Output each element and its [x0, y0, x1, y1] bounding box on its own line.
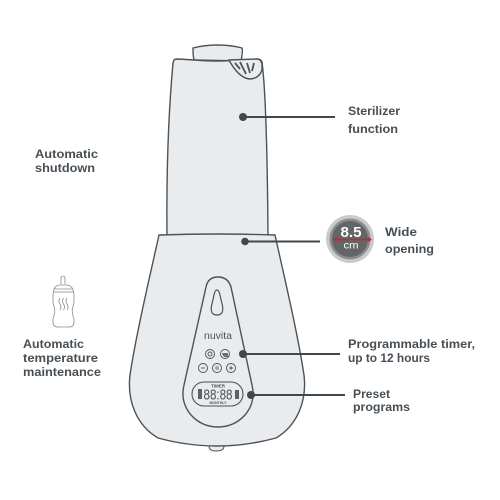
leader line: timer: [239, 350, 340, 358]
icon: 8.5 cm wide opening badge: [326, 215, 374, 263]
device: bottle warmer: [129, 45, 305, 451]
sterilizer upper body: [167, 59, 268, 236]
label: programmable timer: Programmable timer,: [348, 339, 475, 351]
label: automatic temperature maintenance: temperature: [23, 353, 98, 365]
leader line: sterilizer: [239, 113, 335, 121]
label: wide opening: [385, 227, 434, 256]
label: preset programs: Preset: [353, 389, 390, 401]
lid latch: [229, 59, 262, 79]
leader line: preset programs: [247, 391, 345, 399]
timer display: TIMER: [211, 384, 226, 388]
timer display: MONTHLY: [210, 401, 227, 405]
base body: [129, 234, 305, 446]
label: automatic shutdown: [35, 149, 99, 175]
drop indicator: [211, 290, 223, 315]
icon: 8.5 cm wide opening badge: 8.5: [340, 225, 362, 241]
label: programmable timer: up to 12 hours: [348, 353, 430, 365]
label: preset programs: [353, 389, 410, 414]
label: preset programs: programs: [353, 402, 410, 414]
base foot: [209, 446, 224, 451]
label: automatic shutdown: Automatic: [35, 149, 99, 161]
label: wide opening: Wide: [385, 227, 417, 239]
control buttons: [198, 350, 236, 372]
icon: baby bottle with heat waves: [53, 276, 74, 327]
label: automatic temperature maintenance: [23, 339, 101, 379]
leader line: wide opening: [241, 238, 320, 245]
label: sterilizer function: function: [348, 124, 398, 136]
brand logo: nuvita: [204, 330, 232, 342]
label: sterilizer function: [348, 106, 401, 136]
label: programmable timer: [348, 339, 475, 365]
label: automatic temperature maintenance: Automatic: [23, 339, 85, 351]
lid cap: [193, 45, 242, 61]
control panel outline: [183, 277, 253, 427]
timer display: [192, 382, 243, 406]
label: automatic temperature maintenance: maintenance: [23, 367, 101, 379]
icon: 8.5 cm wide opening badge: cm: [344, 240, 359, 252]
label: automatic shutdown: shutdown: [35, 163, 95, 175]
label: sterilizer function: Sterilizer: [348, 106, 401, 118]
label: wide opening: opening: [385, 244, 434, 256]
timer display: 88:88: [204, 386, 232, 404]
